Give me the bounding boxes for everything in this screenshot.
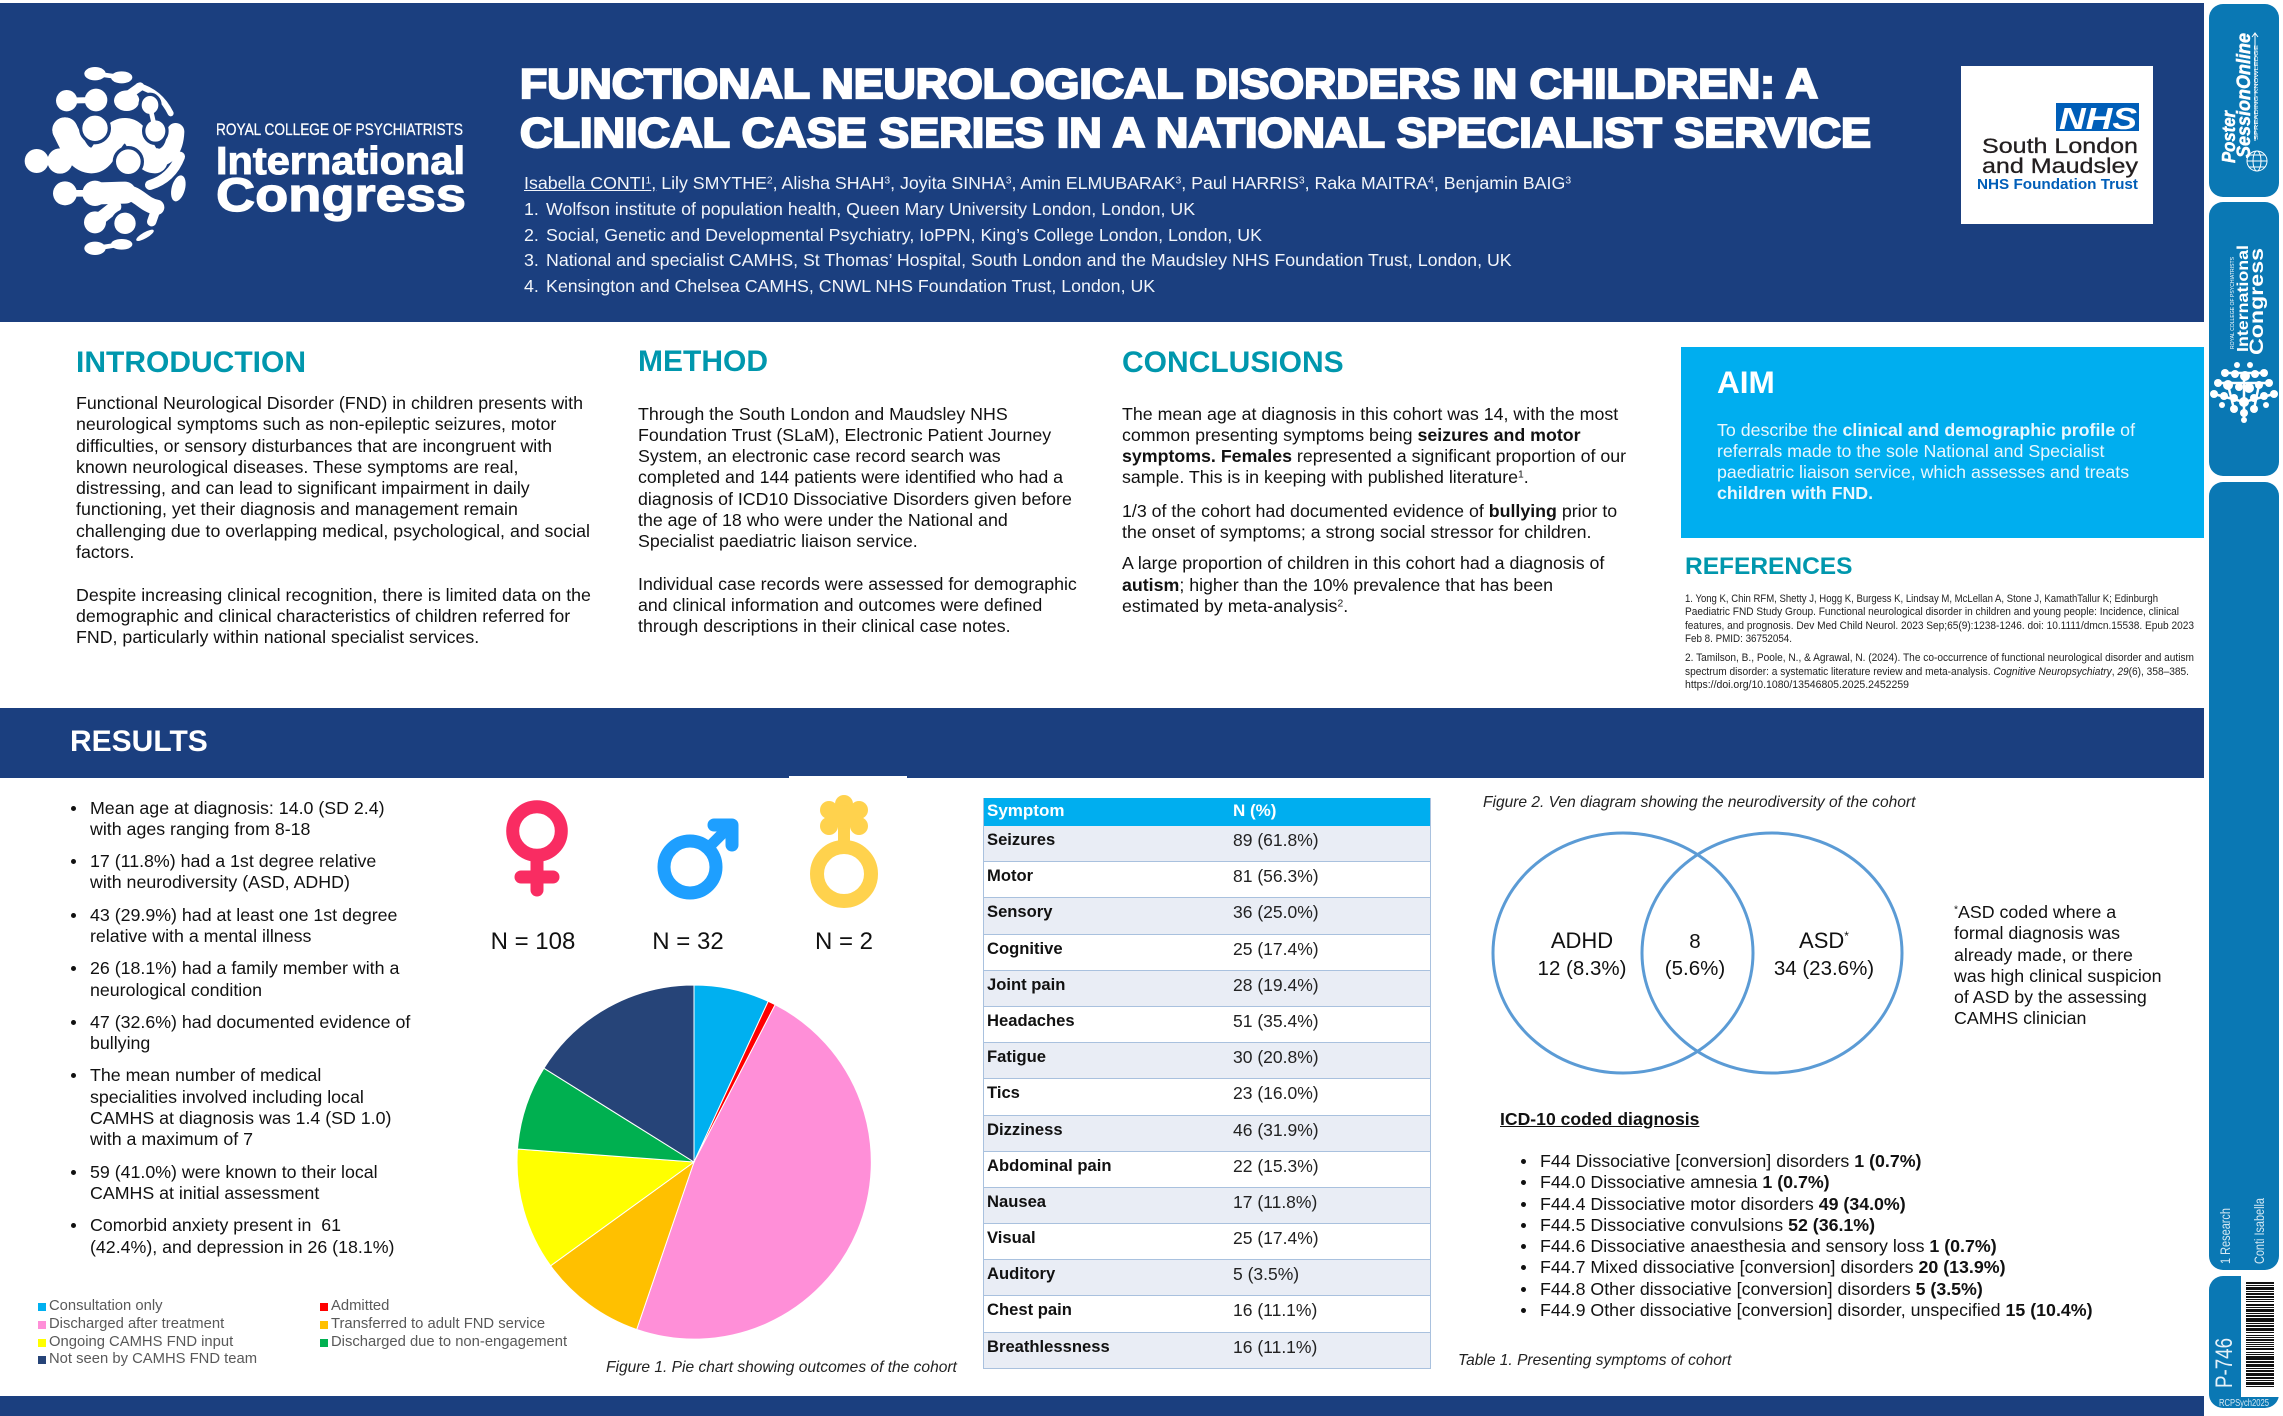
table: presenting symptoms: Cognitive (987, 939, 1063, 958)
list: results bullets: 17 (11.8%) had a 1st degree relative (90, 851, 376, 871)
text: method: Foundation Trust (SLaM), Electronic Patient Journey (638, 425, 1051, 445)
legend: pie chart: Discharged after treatment (49, 1316, 224, 1332)
label: N non-binary: N = 2 (815, 928, 873, 955)
list: results bullets (71, 798, 410, 1257)
table: presenting symptoms: 46 (31.9%) (1233, 1120, 1319, 1140)
affiliations: Kensington and Chelsea CAMHS, CNWL NHS Foundation Trust, London, UK (546, 276, 1155, 296)
affiliations: 4. (524, 276, 539, 296)
text: introduction: Functional Neurological Disorder (FND) in children presents with (76, 393, 583, 413)
text: introduction (76, 393, 591, 647)
table: presenting symptoms: 16 (11.1%) (1233, 1300, 1317, 1320)
logo: conference name (216, 120, 466, 222)
sidebar tab: Poster Session Online: SPREADING KNOWLEDGE (2254, 45, 2260, 140)
table: presenting symptoms: 25 (17.4%) (1233, 1228, 1319, 1248)
table: presenting symptoms: 17 (11.8%) (1233, 1192, 1317, 1212)
note: ASD coding: CAMHS clinician (1954, 1008, 2086, 1028)
text: method: and clinical information and outcomes were defined (638, 595, 1042, 615)
sidebar tab: Poster Session Online (2209, 4, 2279, 197)
legend: pie chart: Not seen by CAMHS FND team (49, 1351, 257, 1367)
text: introduction: demographic and clinical characteristics of children referred for (76, 606, 570, 626)
list: results bullets: (42.4%), and depression in 26 (18.1%) (90, 1237, 394, 1257)
logo: South London and Maudsley NHS: South London (1982, 135, 2138, 158)
heading: method: METHOD (638, 345, 768, 378)
legend: pie chart: Transferred to adult FND service (331, 1316, 545, 1332)
list: ICD-10 diagnoses: F44 Dissociative [conversion] disorders 1 (0.7%) (1540, 1151, 1921, 1171)
table header: Symptom (987, 801, 1064, 820)
text: conclusions: symptoms. Females represented a significant proportion of our (1122, 446, 1626, 466)
text: method: diagnosis of ICD10 Dissociative Disorders given before (638, 489, 1072, 509)
table: presenting symptoms: 89 (61.8%) (1233, 830, 1319, 850)
panel: aim (1681, 347, 2204, 538)
label: N female: N = 108 (491, 928, 575, 955)
venn diagram: neurodiversity: ADHD (1551, 928, 1613, 953)
venn diagram: neurodiversity: 34 (23.6%) (1774, 957, 1874, 980)
table: presenting symptoms: Visual (987, 1228, 1036, 1247)
heading: ICD-10: ICD-10 coded diagnosis (1500, 1109, 1699, 1129)
aim heading: AIM (1717, 364, 1775, 400)
venn diagram: neurodiversity: ASD (1799, 928, 1844, 953)
header banner (0, 3, 2204, 322)
text: method: Specialist paediatric liaison service. (638, 531, 918, 551)
list: results bullets: specialities involved including local (90, 1087, 364, 1107)
list: ICD-10 diagnoses: F44.8 Other dissociative [conversion] disorders 5 (3.5%) (1540, 1279, 1983, 1299)
table: presenting symptoms: 51 (35.4%) (1233, 1011, 1319, 1031)
aim text (1717, 420, 2136, 503)
pie chart: outcomes (518, 986, 871, 1339)
list: results bullets: bullying (90, 1033, 150, 1053)
list: results bullets: 47 (32.6%) had documented evidence of (90, 1012, 410, 1032)
legend: pie chart: Admitted (331, 1298, 389, 1314)
table: presenting symptoms: Sensory (987, 902, 1052, 921)
list: results bullets: Mean age at diagnosis: 14.0 (SD 2.4) (90, 798, 385, 818)
text: introduction: functioning, yet their diagnosis and management remain (76, 499, 518, 519)
list: results bullets: neurological condition (90, 980, 262, 1000)
table: presenting symptoms: 16 (11.1%) (1233, 1337, 1317, 1357)
table: presenting symptoms: 36 (25.0%) (1233, 902, 1319, 922)
table: presenting symptoms: 5 (3.5%) (1233, 1264, 1299, 1284)
text: method (638, 404, 1077, 636)
aim text: referrals made to the sole National and Specialist (1717, 441, 2104, 461)
authors: Isabella CONTI1, Lily SMYTHE2, Alisha SHAH3, Joyita SINHA3, Amin ELMUBARAK3, Paul HARRIS3, Raka MAITRA4, Benjamin BAIG3 (524, 173, 1571, 193)
logo: brain mark (24, 67, 186, 255)
list: ICD-10 diagnoses: F44.4 Dissociative motor disorders 49 (34.0%) (1540, 1194, 1906, 1214)
list: results bullets: with a maximum of 7 (90, 1129, 253, 1149)
table: presenting symptoms: Seizures (987, 830, 1055, 849)
table: presenting symptoms: Headaches (987, 1011, 1075, 1030)
title: FUNCTIONAL NEUROLOGICAL DISORDERS IN CHILDREN: A (520, 60, 1818, 107)
venn diagram: neurodiversity (1492, 832, 1904, 1074)
table: presenting symptoms: 81 (56.3%) (1233, 866, 1319, 886)
title (520, 60, 1871, 156)
list: ICD-10 diagnoses: F44.9 Other dissociative [conversion] disorder, unspecified 15 (10.4%) (1540, 1300, 2093, 1320)
text: introduction: challenging due to overlapping medical, psychological, and social (76, 521, 590, 541)
list: results bullets: 43 (29.9%) had at least one 1st degree (90, 905, 397, 925)
caption: figure 1: Figure 1. Pie chart showing outcomes of the cohort (606, 1359, 957, 1376)
table: presenting symptoms: Chest pain (987, 1300, 1072, 1319)
table: presenting symptoms: 23 (16.0%) (1233, 1083, 1319, 1103)
text: conclusions: autism; higher than the 10% prevalence that has been (1122, 575, 1553, 595)
list: results bullets: CAMHS at diagnosis was 1.4 (SD 1.0) (90, 1108, 391, 1128)
affiliations: 1. (524, 199, 539, 219)
sidebar tab: category and author: 1 Research (2218, 1208, 2233, 1264)
note: ASD coding: was high clinical suspicion (1954, 966, 2162, 986)
table: presenting symptoms: Motor (987, 866, 1033, 885)
text: method: through descriptions in their clinical case notes. (638, 616, 1011, 636)
heading: conclusions: CONCLUSIONS (1122, 346, 1344, 379)
text: introduction: factors. (76, 542, 134, 562)
legend: pie chart (38, 1298, 567, 1367)
text: conclusions: estimated by meta-analysis2. (1122, 596, 1348, 616)
logo: South London and Maudsley NHS: NHS (2059, 101, 2137, 136)
title: CLINICAL CASE SERIES IN A NATIONAL SPECIALIST SERVICE (520, 109, 1871, 156)
text: references: Feb 8. PMID: 36752054. (1685, 633, 1792, 645)
footer banner (0, 1396, 2204, 1416)
affiliations: Wolfson institute of population health, Queen Mary University London, London, UK (546, 199, 1195, 219)
note: ASD coding: already made, or there (1954, 945, 2133, 965)
table: presenting symptoms: Nausea (987, 1192, 1046, 1211)
aim text: paediatric liaison service, which assesses and treats (1717, 462, 2129, 482)
text: introduction: Despite increasing clinical recognition, there is limited data on the (76, 585, 591, 605)
list: ICD-10 diagnoses: F44.7 Mixed dissociative [conversion] disorders 20 (13.9%) (1540, 1257, 2006, 1277)
sidebar tab: category and author (2209, 482, 2279, 1270)
logo: South London and Maudsley NHS: NHS Foundation Trust (1977, 177, 2138, 193)
text: conclusions (1122, 404, 1626, 616)
table: presenting symptoms: Breathlessness (987, 1337, 1110, 1356)
note: ASD coding: of ASD by the assessing (1954, 987, 2147, 1007)
text: references: spectrum disorder: a systematic literature review and meta-analysis. Cognitive Neuropsychiatry, 29(6), 358–385. (1685, 666, 2189, 678)
affiliations (524, 199, 1512, 296)
heading: introduction: INTRODUCTION (76, 346, 306, 379)
list: ICD-10 diagnoses (1521, 1151, 2093, 1320)
list: results bullets: relative with a mental illness (90, 926, 311, 946)
list: results bullets: 26 (18.1%) had a family member with a (90, 958, 399, 978)
list: results bullets: The mean number of medical (90, 1065, 321, 1085)
white notch in results banner (789, 776, 907, 779)
text: method: System, an electronic case record search was (638, 446, 1001, 466)
affiliations: 3. (524, 250, 539, 270)
list: results bullets: CAMHS at initial assessment (90, 1183, 319, 1203)
label: N male: N = 32 (652, 928, 724, 955)
text: introduction: neurological symptoms such as non-epileptic seizures, motor (76, 414, 556, 434)
aim text: children with FND. (1717, 483, 1873, 503)
text: conclusions: The mean age at diagnosis in this cohort was 14, with the most (1122, 404, 1618, 424)
table: presenting symptoms: Fatigue (987, 1047, 1046, 1066)
legend: pie chart: Ongoing CAMHS FND input (49, 1334, 233, 1350)
table: presenting symptoms: Tics (987, 1083, 1020, 1102)
sidebar tab: International Congress: International (2235, 245, 2252, 352)
text: introduction: difficulties, or sensory disturbances that are incongruent with (76, 436, 552, 456)
venn diagram: neurodiversity: 8 (1689, 930, 1701, 953)
list: ICD-10 diagnoses: F44.5 Dissociative convulsions 52 (36.1%) (1540, 1215, 1875, 1235)
table: presenting symptoms: 22 (15.3%) (1233, 1156, 1319, 1176)
logo: South London and Maudsley NHS (1961, 66, 2153, 224)
list: ICD-10 diagnoses: F44.6 Dissociative anaesthesia and sensory loss 1 (0.7%) (1540, 1236, 1997, 1256)
text: method: the age of 18 who were under the National and (638, 510, 1008, 530)
sidebar tab: poster number and barcode: P-746 (2211, 1338, 2238, 1388)
list: results bullets: Comorbid anxiety present in 61 (90, 1215, 341, 1235)
table header (984, 798, 1430, 826)
list: results bullets: with ages ranging from 8-18 (90, 819, 310, 839)
venn diagram: neurodiversity: (5.6%) (1665, 957, 1725, 980)
legend: pie chart: Consultation only (49, 1298, 163, 1314)
table: presenting symptoms: Dizziness (987, 1120, 1063, 1138)
table: presenting symptoms: Auditory (987, 1264, 1055, 1283)
table: presenting symptoms: Abdominal pain (987, 1156, 1111, 1175)
note: ASD coding: *ASD coded where a (1954, 902, 2116, 922)
text: references: https://doi.org/10.1080/13546805.2025.2452259 (1685, 679, 1909, 691)
icon: male symbol (658, 818, 738, 900)
text: introduction: distressing, and can lead to significant impairment in daily (76, 478, 530, 498)
caption: figure 2: Figure 2. Ven diagram showing the neurodiversity of the cohort (1483, 794, 1915, 811)
sidebar tab: Poster Session Online: Poster (2219, 110, 2239, 163)
text: introduction: known neurological diseases. These symptoms are real, (76, 457, 518, 477)
list: ICD-10 diagnoses: F44.0 Dissociative amnesia 1 (0.7%) (1540, 1172, 1830, 1192)
sidebar tab: International Congress: Congress (2247, 248, 2268, 355)
note: ASD coding (1954, 902, 2162, 1028)
table: presenting symptoms (983, 798, 1431, 1369)
table header: N (%) (1233, 801, 1276, 820)
sidebar tab: International Congress (2209, 202, 2279, 476)
venn diagram: neurodiversity: * (1844, 929, 1849, 943)
aim text: To describe the clinical and demographic profile of (1717, 420, 2135, 440)
icon: female symbol (506, 800, 568, 896)
text: method: Individual case records were assessed for demographic (638, 574, 1077, 594)
affiliations: 2. (524, 225, 539, 245)
sidebar tab: Poster Session Online: SessionOnline (2234, 33, 2255, 158)
sidebar tab: category and author: Conti Isabella (2252, 1198, 2267, 1264)
note: ASD coding: formal diagnosis was (1954, 923, 2120, 943)
icon: non-binary symbol (810, 795, 878, 908)
table: presenting symptoms: 28 (19.4%) (1233, 975, 1319, 995)
text: method: completed and 144 patients were identified who had a (638, 467, 1063, 487)
sidebar tab: International Congress: ROYAL COLLEGE OF PSYCHIATRISTS (2230, 256, 2236, 349)
logo: South London and Maudsley NHS: and Maudsley (1982, 155, 2139, 178)
text: method: Through the South London and Maudsley NHS (638, 404, 1008, 424)
results banner (0, 708, 2204, 778)
list: results bullets: with neurodiversity (ASD, ADHD) (90, 872, 350, 892)
logo: conference name: International (216, 140, 465, 183)
logo: conference name: Congress (216, 168, 466, 221)
heading: references: REFERENCES (1685, 553, 1852, 580)
venn diagram: neurodiversity: 12 (8.3%) (1538, 957, 1626, 980)
table: presenting symptoms: 30 (20.8%) (1233, 1047, 1319, 1067)
legend: pie chart: Discharged due to non-engagement (331, 1334, 567, 1350)
sidebar tab: poster number and barcode (2209, 1276, 2279, 1408)
text: references (1685, 593, 2194, 691)
text: conclusions: the onset of symptoms; a strong social stressor for children. A large proportion of children in this cohort had a diagnosis of (1122, 522, 1604, 573)
affiliations: National and specialist CAMHS, St Thomas’ Hospital, South London and the Maudsley NHS Foundation Trust, London, UK (546, 250, 1512, 270)
text: introduction: FND, particularly within national specialist services. (76, 627, 479, 647)
text: conclusions: common presenting symptoms being seizures and motor (1122, 425, 1581, 445)
text: conclusions: sample. This is in keeping with published literature1. 1/3 of the cohort had documented evidence of bullying prior to (1122, 467, 1617, 521)
list: results bullets: 59 (41.0%) were known to their local (90, 1162, 378, 1182)
table: presenting symptoms: 25 (17.4%) (1233, 939, 1319, 959)
table: presenting symptoms: Joint pain (987, 975, 1065, 994)
heading: results: RESULTS (70, 725, 208, 758)
affiliations: Social, Genetic and Developmental Psychiatry, IoPPN, King’s College London, London, UK (546, 225, 1262, 245)
caption: table 1: Table 1. Presenting symptoms of cohort (1458, 1352, 1731, 1369)
